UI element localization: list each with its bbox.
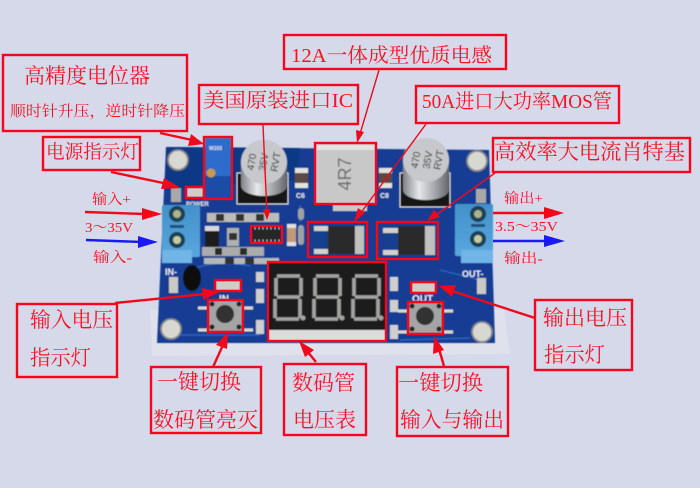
LEDs: [187, 188, 435, 292]
arrow: Schottky: [427, 173, 495, 221]
callout: inductor: 12A一体成型优质电感: [291, 44, 492, 67]
callout: output voltage indicator: 指示灯: [544, 343, 605, 367]
callout: potentiometer: 高精度电位器: [24, 64, 150, 88]
capacitor right: 470: [410, 150, 423, 169]
left terminal block: [162, 205, 200, 263]
arrow: input indicator: [115, 288, 219, 303]
MOSFET left: [309, 223, 367, 257]
right terminal block: [455, 204, 493, 263]
seven segment display: [268, 262, 386, 341]
callout: input voltage indicator: 指示灯: [30, 346, 91, 370]
input plus arrow: [85, 208, 162, 220]
callout: potentiometer: [3, 55, 187, 131]
callout: voltmeter: 电压表: [293, 408, 356, 432]
callout: MOSFET: 50A进口大功率MOS管: [422, 90, 612, 113]
circuit board photo: [157, 138, 495, 343]
callout: display toggle: [151, 367, 261, 433]
small parts: [165, 168, 486, 339]
small parts: IN-: [165, 267, 177, 277]
small parts: C8: [380, 193, 389, 200]
push button OUT: [398, 303, 453, 333]
IC chip: [252, 227, 281, 242]
output plus arrow: [493, 207, 564, 219]
callout: input output toggle: 输入与输出: [400, 408, 504, 432]
capacitor right: RVT: [432, 149, 447, 171]
callout: output voltage indicator: 输出电压: [543, 306, 627, 330]
small parts: POWER: [186, 202, 209, 208]
callout: Schottky: [493, 138, 690, 172]
callout: power indicator: [43, 137, 140, 170]
input voltage label: 3～35V: [85, 221, 133, 236]
input minus arrow: [86, 236, 158, 248]
push button IN: [198, 301, 253, 331]
arrow: MOSFET: [354, 124, 426, 222]
arrow: power indicator: [111, 172, 181, 189]
arrow: IC: [263, 125, 271, 220]
small parts: OUT: [412, 294, 433, 305]
callout: MOSFET: [416, 86, 619, 123]
callout: IC: [199, 85, 358, 124]
callout: voltmeter: 数码管: [292, 371, 355, 395]
output voltage label: 3.5～35V: [495, 220, 558, 235]
capacitor left: RVT: [269, 151, 284, 173]
mounting holes: [161, 150, 492, 342]
small parts: IN: [219, 294, 229, 305]
callout: potentiometer: 顺时针升压，逆时针降压: [10, 103, 185, 120]
capacitor left: [237, 140, 288, 204]
input minus label: 输入-: [93, 250, 132, 266]
callout: display toggle: 一键切换: [157, 370, 241, 394]
callout: inductor: [284, 35, 506, 69]
callout: voltmeter: [284, 364, 366, 435]
arrow: input output toggle: [433, 336, 444, 366]
small parts: C6: [296, 193, 305, 200]
callout: Schottky: 高效率大电流肖特基: [494, 140, 685, 164]
inductor: [315, 143, 376, 204]
capacitor right: 35V: [422, 150, 436, 170]
output plus label: 输出+: [504, 191, 543, 207]
capacitor right: [400, 138, 450, 207]
arrow: potentiometer: [160, 133, 204, 146]
callout: input voltage indicator: [17, 304, 117, 377]
callout: input voltage indicator: 输入电压: [30, 308, 113, 332]
trimmer potentiometer: [205, 138, 231, 198]
arrow: inductor: [356, 70, 379, 143]
callout: power indicator: 电源指示灯: [46, 141, 139, 163]
Schottky diode: [378, 223, 437, 258]
arrow: output indicator: [439, 285, 535, 318]
input plus label: 输入+: [92, 192, 131, 208]
output minus arrow: [493, 235, 565, 247]
callout: display toggle: 数码管亮灭: [153, 408, 258, 432]
output minus label: 输出-: [504, 251, 543, 267]
capacitor left: 470: [246, 152, 259, 171]
highlight frames on components: [186, 137, 443, 341]
arrow: display toggle: [213, 332, 228, 367]
callout: input output toggle: [397, 367, 508, 436]
callout: output voltage indicator: [535, 300, 632, 370]
inductor: 4R7: [335, 157, 355, 191]
trimmer potentiometer: W103: [209, 146, 222, 152]
callout: input output toggle: 一键切换: [398, 371, 483, 395]
capacitor left: 35V: [258, 152, 272, 172]
arrow: voltmeter: [299, 341, 316, 362]
callout: IC: 美国原装进口IC: [203, 89, 353, 112]
small parts: OUT-: [462, 269, 484, 279]
